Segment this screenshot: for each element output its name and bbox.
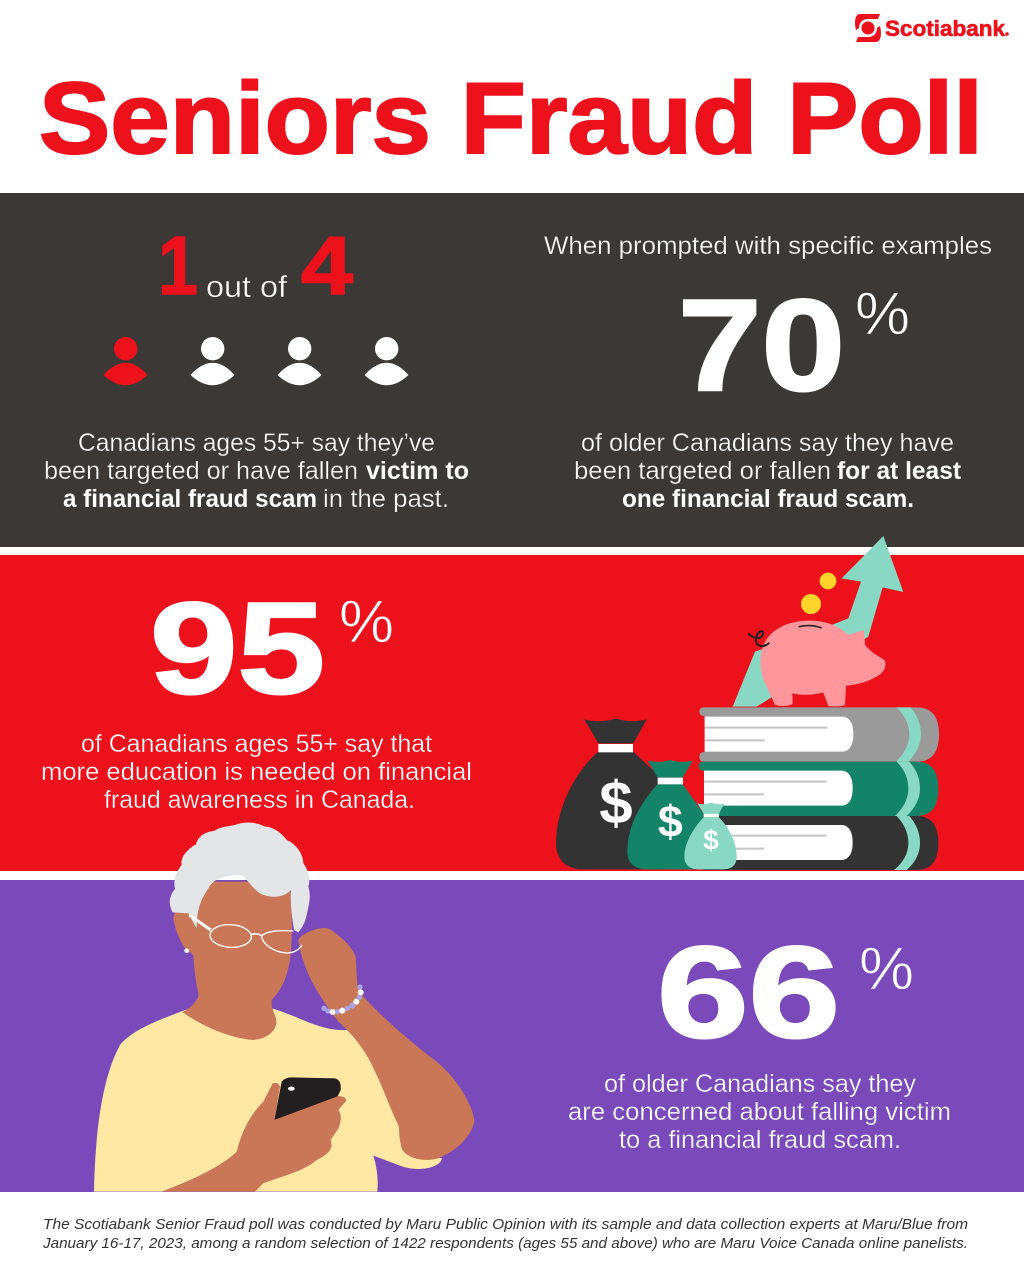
phone bbox=[274, 1077, 341, 1120]
illustration: books, money bags, piggy bank bbox=[556, 536, 939, 870]
stat: 1 out of 4: 1 bbox=[158, 219, 198, 312]
text: targeted or victim: Canadians ages 55+ say they’ve bbox=[78, 429, 435, 457]
icon: piggy bank bbox=[749, 621, 885, 706]
hand holding phone bbox=[162, 1083, 346, 1192]
text: concerned about falling victim: are concerned about falling victim bbox=[568, 1098, 951, 1126]
text: targeted or victim: victim to bbox=[366, 457, 469, 485]
icons: four people bbox=[104, 337, 408, 385]
text: at least one scam: been targeted or fallen bbox=[574, 457, 831, 485]
text: more education needed bbox=[41, 730, 472, 814]
text: prompted heading: When prompted with specific examples bbox=[544, 232, 992, 260]
stat: 66 percent: 66 bbox=[657, 919, 840, 1065]
text: targeted or victim: a financial fraud scam bbox=[63, 485, 317, 513]
icon: small money bag: $ bbox=[703, 824, 719, 855]
stat: 1 out of 4: 4 bbox=[301, 219, 353, 312]
footnote: January 16-17, 2023, among a random selection of 1422 respondents (ages 55 and above) who are Maru Voice Canada online panelists. bbox=[42, 1236, 968, 1252]
stat: 70 percent bbox=[678, 272, 910, 418]
icon: growth arrow bbox=[733, 536, 903, 707]
icon: medium money bag bbox=[627, 760, 703, 869]
text: targeted or victim: been targeted or have fallen bbox=[44, 457, 358, 485]
text: more education needed: more education is needed on financial bbox=[41, 758, 472, 786]
icon: small money bag bbox=[684, 803, 737, 869]
stat: 95 percent: % bbox=[339, 588, 394, 655]
text: targeted or victim: in the past. bbox=[323, 485, 449, 513]
icon: medium money bag: $ bbox=[658, 798, 683, 847]
panel: red statistics bbox=[0, 536, 1024, 871]
illustration: senior woman with phone bbox=[94, 822, 474, 1192]
stat: 95 percent bbox=[150, 575, 394, 721]
icon: large money bag: $ bbox=[599, 769, 633, 836]
text: concerned about falling victim bbox=[568, 1070, 951, 1154]
text: at least one scam: one financial fraud scam. bbox=[622, 485, 914, 513]
earring bbox=[184, 948, 189, 953]
panel: purple statistics bbox=[0, 880, 1024, 1192]
logo: Scotiabank: Scotiabank bbox=[885, 16, 1006, 41]
text: at least one scam: for at least bbox=[837, 457, 962, 485]
icon: gold coins bbox=[801, 573, 836, 614]
footnote: The Scotiabank Senior Fraud poll was conducted by Maru Public Opinion with its sample and data collection experts at Maru/Blue from bbox=[43, 1217, 968, 1233]
panel: dark statistics bbox=[0, 193, 1024, 547]
stat: 66 percent: % bbox=[859, 935, 914, 1002]
raised arm bbox=[298, 928, 474, 1160]
text: at least one scam: of older Canadians say they have bbox=[581, 429, 954, 457]
shirt bbox=[94, 1008, 442, 1192]
glasses bbox=[189, 915, 302, 953]
stat: 66 percent bbox=[657, 919, 914, 1065]
head and neck bbox=[173, 882, 292, 1040]
text: at least one scam bbox=[574, 429, 962, 513]
text: concerned about falling victim: of older Canadians say they bbox=[604, 1070, 916, 1098]
stat: 1 out of 4 bbox=[158, 219, 353, 312]
hair bbox=[170, 822, 310, 932]
text: targeted or victim bbox=[44, 429, 469, 513]
stat: 70 percent: % bbox=[855, 280, 910, 347]
text: concerned about falling victim: to a financial fraud scam. bbox=[619, 1126, 901, 1154]
icon: stacked books bbox=[699, 707, 939, 870]
stat: 95 percent: 95 bbox=[150, 575, 325, 721]
text: more education needed: of Canadians ages 55+ say that bbox=[81, 730, 432, 758]
stat: 70 percent: 70 bbox=[678, 272, 845, 418]
footnote bbox=[42, 1217, 968, 1252]
icon: large money bag bbox=[556, 719, 660, 869]
stat: 1 out of 4: out of bbox=[206, 269, 287, 304]
title: Seniors Fraud Poll bbox=[39, 63, 983, 175]
logo: Scotiabank bbox=[855, 14, 1009, 42]
bracelet bbox=[321, 984, 364, 1015]
text: more education needed: fraud awareness in Canada. bbox=[104, 786, 415, 814]
